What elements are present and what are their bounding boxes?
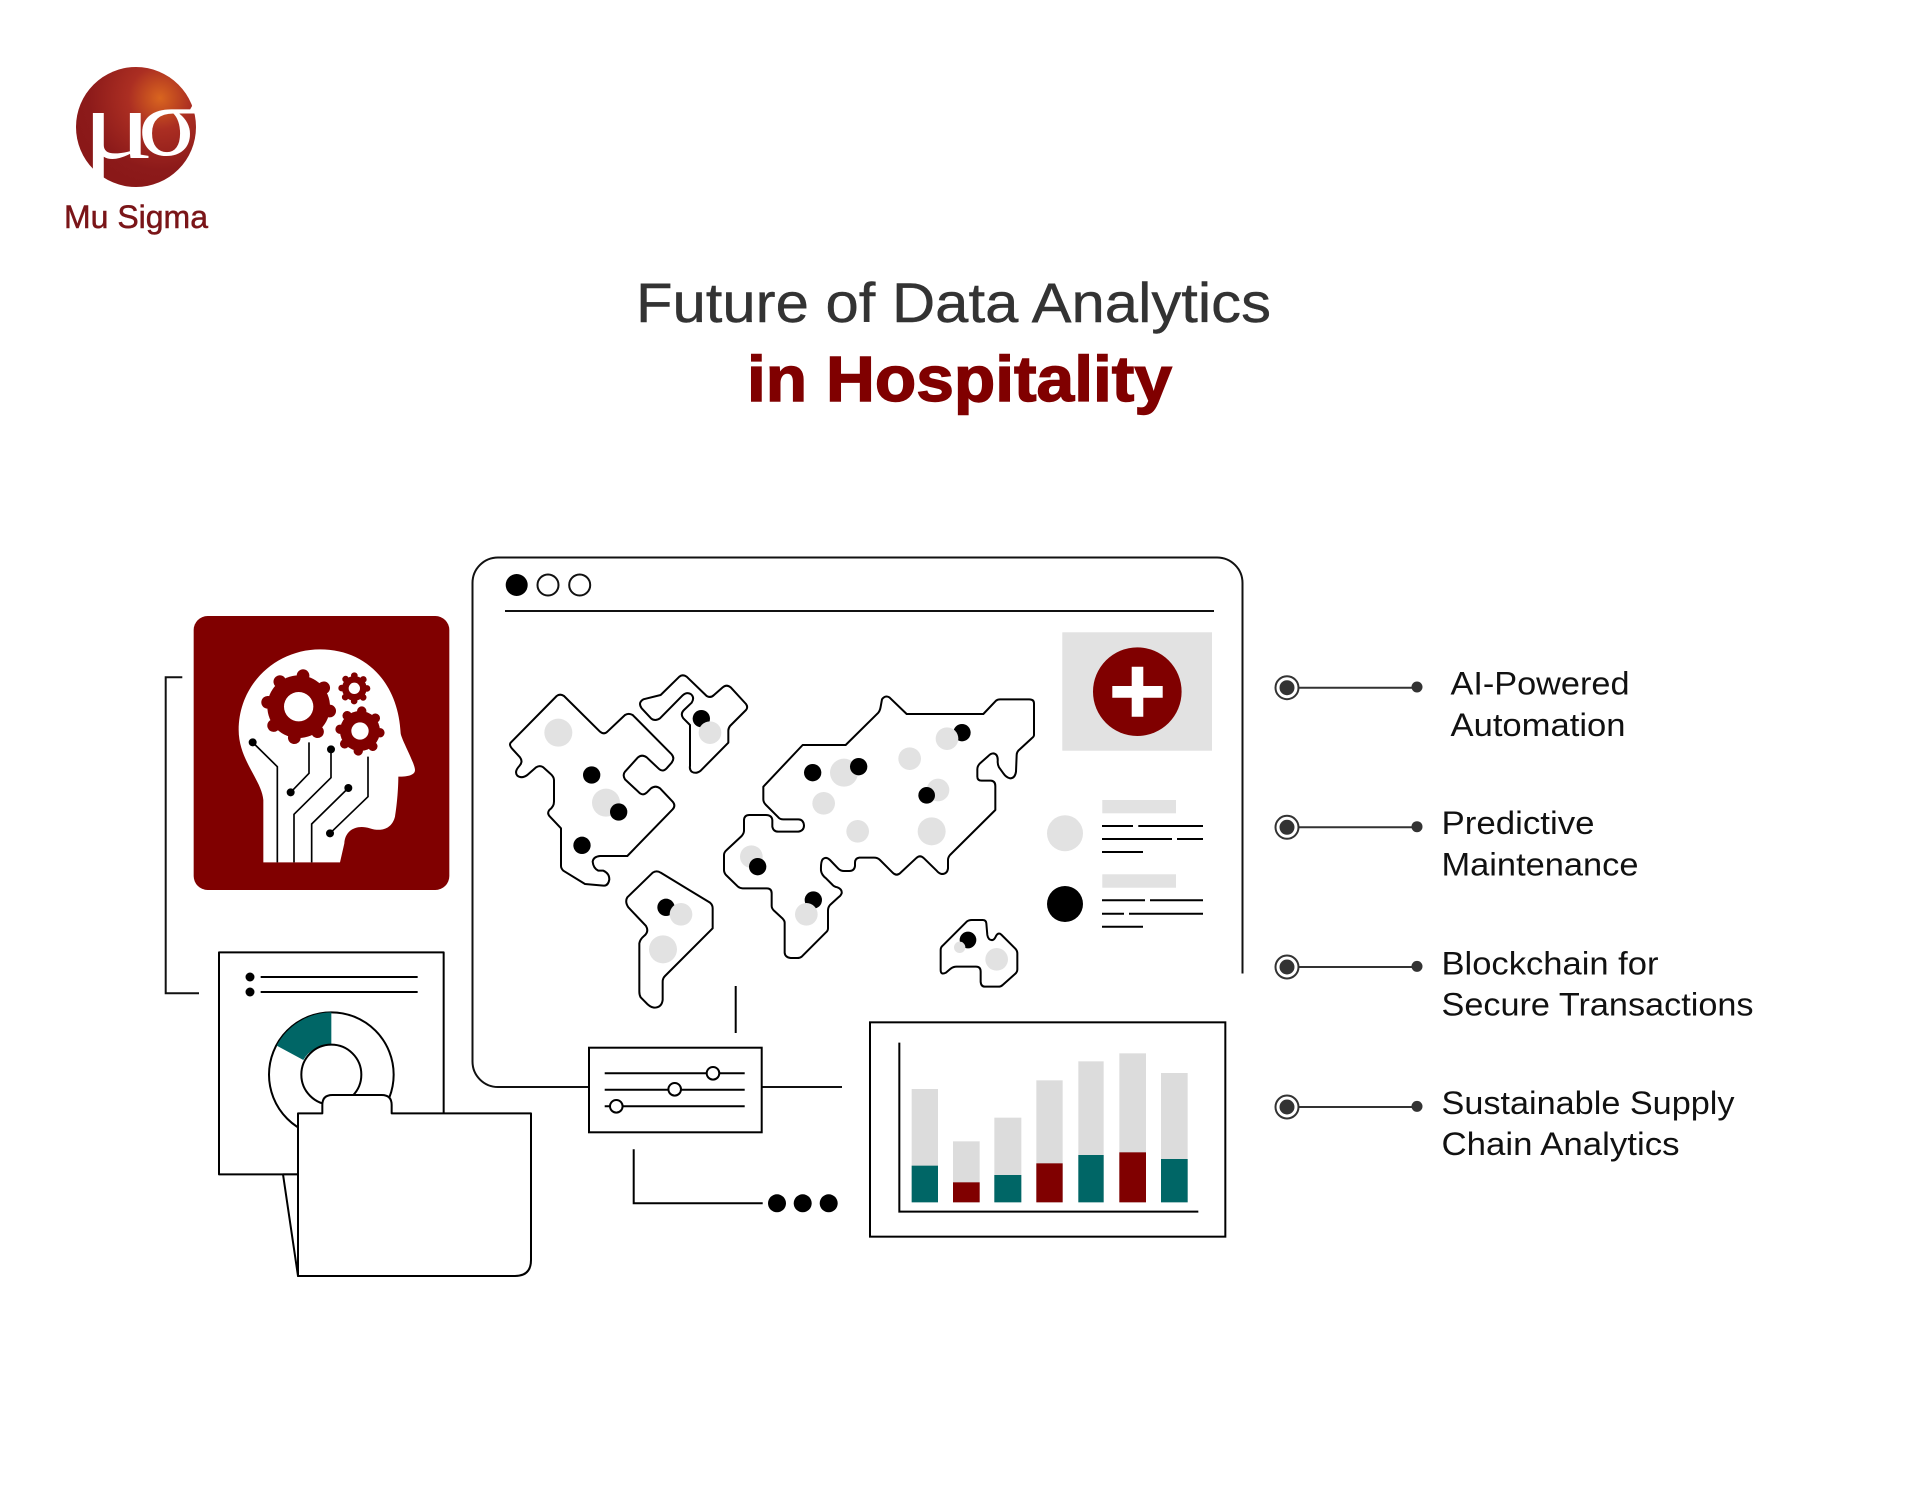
legend: light marker entry [1047, 800, 1203, 852]
donut chart [269, 1012, 394, 1137]
foreground bars [912, 1152, 1188, 1202]
icon: medical cross [1093, 647, 1182, 736]
callout: Blockchain for Secure Transactions: Blockchain for [1442, 946, 1659, 982]
panel: report with donut and folder [219, 952, 531, 1276]
panel: slider control [589, 986, 762, 1132]
callout: Predictive Maintenance [1276, 805, 1638, 882]
background bars [912, 1053, 1188, 1202]
folder [298, 1095, 531, 1276]
logo mark letters [82, 66, 198, 180]
connector with three dots [634, 1149, 838, 1212]
world map [510, 675, 747, 1008]
callout: Sustainable Supply Chain Analytics: Chain Analytics [1442, 1126, 1680, 1162]
head silhouette [239, 649, 415, 862]
callout: Predictive Maintenance: Maintenance [1442, 846, 1638, 882]
map: north america [510, 695, 674, 886]
map: greenland [640, 675, 747, 773]
logo mark circle [76, 67, 196, 187]
callout: Predictive Maintenance: Predictive [1442, 805, 1594, 841]
axes [899, 1043, 1198, 1212]
callout: AI-Powered Automation: AI-Powered [1450, 666, 1630, 702]
report sheet [219, 952, 444, 1174]
callout: Sustainable Supply Chain Analytics [1276, 1085, 1734, 1162]
sheet back edge [283, 1174, 298, 1276]
map: eurasia and africa [724, 697, 1034, 958]
icon: AI head card [194, 616, 449, 890]
callout: Sustainable Supply Chain Analytics: Sustainable Supply [1442, 1085, 1734, 1121]
legend: dark marker entry [1047, 874, 1203, 927]
callout: AI-Powered Automation: Automation [1450, 707, 1626, 743]
report header lines [245, 972, 418, 996]
callout: AI-Powered Automation [1276, 666, 1630, 743]
callout: Blockchain for Secure Transactions: Secure Transactions [1442, 986, 1754, 1022]
map: south america [626, 871, 713, 1008]
logo mark letters: σ [138, 66, 198, 177]
logo: Mu Sigma [64, 66, 208, 235]
title [636, 271, 1271, 415]
gears [263, 671, 382, 753]
callout: Blockchain for Secure Transactions [1276, 946, 1754, 1022]
circuit traces [253, 742, 368, 862]
title line 2: in Hospitality [747, 343, 1172, 415]
logo mark letters: μ [82, 72, 154, 180]
bar chart [870, 1022, 1225, 1237]
panel: browser window frame [472, 558, 1242, 1087]
map: australia [941, 920, 1017, 987]
connector bracket [166, 677, 199, 993]
title line 1: Future of Data Analytics [636, 271, 1271, 334]
panel: hospital cross card [1062, 632, 1212, 751]
logo wordmark: Mu Sigma [64, 199, 208, 235]
browser title bar [505, 574, 1214, 611]
